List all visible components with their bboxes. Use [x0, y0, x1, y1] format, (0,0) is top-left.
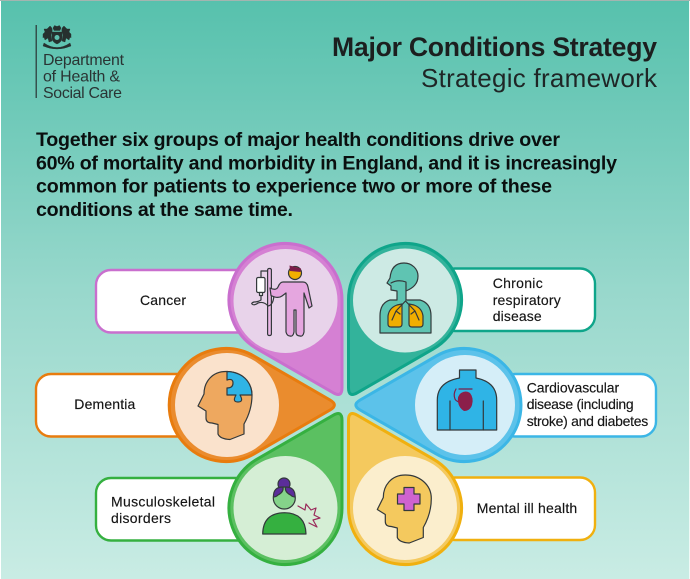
label box: cancer: Cancer	[140, 292, 186, 308]
pin: chronic respiratory disease	[348, 243, 462, 395]
label box: dementia	[36, 374, 216, 436]
icon: head with jigsaw piece	[175, 353, 279, 457]
panel: dementia	[36, 348, 334, 462]
logo: Department of Health & Social Care: Social Care	[43, 85, 122, 102]
label box: dementia: Dementia	[74, 396, 136, 412]
intro text block: conditions at the same time.	[36, 199, 293, 221]
label box: cardiovascular disease and diabetes	[500, 374, 656, 436]
label box: mental ill health: Mental ill health	[477, 500, 577, 516]
intro text block: common for patients to experience two or more of these	[36, 176, 552, 198]
intro text block: 60% of mortality and morbidity in England, and it is increasingly	[36, 152, 617, 174]
panel: mental ill health	[348, 413, 595, 565]
intro text block	[36, 129, 617, 221]
label box: mental ill health	[440, 478, 595, 540]
logo: Department of Health & Social Care: Department	[43, 52, 125, 69]
panel: cancer	[96, 243, 342, 395]
label box: musculoskeletal disorders	[96, 478, 276, 540]
title: Major Conditions Strategy	[332, 32, 657, 62]
icon: lungs	[353, 248, 457, 352]
logo: Department of Health & Social Care	[36, 25, 125, 102]
panel: cardiovascular disease and diabetes	[356, 348, 656, 462]
subtitle: Strategic framework	[421, 63, 658, 93]
icon: torso with heart	[415, 355, 515, 455]
label box: chronic respiratory disease: Chronic	[493, 275, 543, 291]
label box: cardiovascular disease and diabetes: stroke) and diabetes	[527, 413, 648, 429]
label box: cancer	[96, 270, 276, 332]
label box: chronic respiratory disease	[440, 268, 595, 331]
label box: musculoskeletal disorders: Musculoskeletal	[111, 494, 215, 510]
label box: musculoskeletal disorders: disorders	[111, 510, 171, 526]
label box: cardiovascular disease and diabetes: Cardiovascular	[527, 380, 620, 396]
icon: royal crest	[43, 26, 71, 49]
pin: dementia	[169, 348, 334, 462]
label box: cardiovascular disease and diabetes: disease (including	[527, 396, 634, 412]
label box: chronic respiratory disease: respiratory	[493, 292, 561, 308]
pin: mental ill health	[348, 413, 461, 565]
pin: cancer	[229, 243, 342, 395]
logo: Department of Health & Social Care: of Health &	[43, 68, 120, 86]
pin: cardiovascular disease and diabetes	[356, 348, 521, 462]
icon: person with neck pain	[234, 456, 338, 560]
icon: head with cross	[353, 456, 457, 560]
pin: musculoskeletal disorders	[229, 413, 342, 565]
icon: cancer patient with drip	[234, 249, 338, 353]
intro text block: Together six groups of major health conditions drive over	[36, 129, 560, 151]
panel: musculoskeletal disorders	[96, 413, 342, 565]
panel: chronic respiratory disease	[348, 243, 595, 395]
label box: chronic respiratory disease: disease	[493, 308, 542, 324]
